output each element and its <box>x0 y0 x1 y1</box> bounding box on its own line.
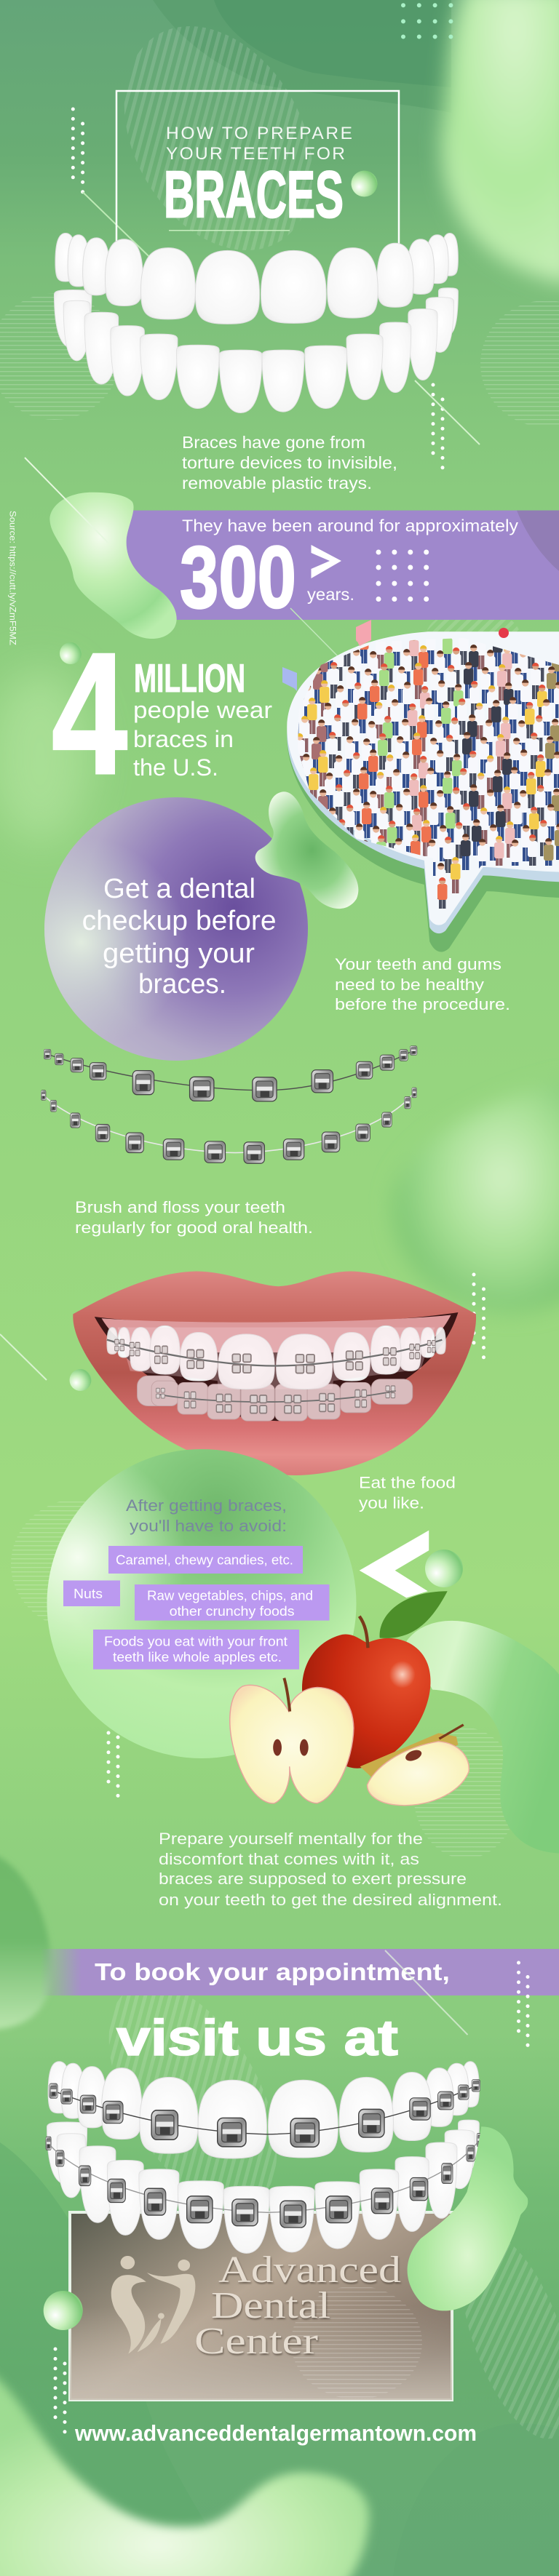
health note text: before the procedure. <box>335 995 510 1013</box>
stat: 4 million: the U.S. <box>133 754 218 781</box>
decorative dots: under circle <box>108 1733 118 1798</box>
checkup text: braces. <box>138 969 226 1000</box>
tag: raw vegetables <box>135 1584 329 1621</box>
blurred blob: left lower <box>0 1851 51 2030</box>
halved apple stem and seeds <box>284 1678 290 1712</box>
lower wire <box>49 2140 480 2212</box>
checkup text <box>82 874 277 1000</box>
icon: white chevron <box>360 1531 429 1598</box>
bubble edge <box>287 638 559 933</box>
people <box>290 627 559 914</box>
health note text: need to be healthy <box>335 976 484 994</box>
website url: www.advanceddentalgermantown.com <box>74 2420 477 2446</box>
tag: front teeth foods <box>93 1630 299 1670</box>
tag: nuts <box>63 1580 120 1606</box>
icon: sphere by chevron <box>425 1550 463 1587</box>
green blob over logo card <box>408 2126 528 2310</box>
clinic name <box>194 2249 401 2362</box>
blurred blob: top right <box>441 0 559 285</box>
stat: 4 million <box>52 618 272 810</box>
icon: sphere beside smile <box>70 1369 92 1391</box>
diagonal accent line <box>415 380 480 444</box>
lower brackets <box>46 2133 483 2228</box>
apple stem <box>360 1616 368 1648</box>
apple slice <box>367 1742 469 1806</box>
stat: 4 million: MILLION <box>134 656 245 701</box>
visit us at heading: visit us at <box>116 2009 398 2066</box>
booking text: To book your appointment, <box>95 1958 450 1985</box>
icon: pink speech bubble <box>356 620 371 646</box>
upper brackets <box>49 2080 480 2147</box>
illustration: smile with braces <box>73 1272 476 1475</box>
eat the food text <box>359 1474 456 1512</box>
mouth interior <box>95 1312 458 1421</box>
brush and floss text: Brush and floss your teeth <box>75 1198 285 1216</box>
illustration: crowd on speech bubble <box>282 620 559 952</box>
gums <box>102 1315 451 1352</box>
mental preparation text: discomfort that comes with it, as <box>159 1850 419 1868</box>
soft light patch: left <box>0 669 91 844</box>
illustration: apples <box>230 1591 469 1806</box>
decorative dots: beside title <box>73 109 83 194</box>
decorative dots: top right <box>403 5 453 37</box>
diagonal accent line <box>290 608 338 657</box>
eat the food text: you like. <box>359 1494 424 1512</box>
avoid heading: you'll have to avoid: <box>130 1517 287 1535</box>
eat the food text: Eat the food <box>359 1474 456 1491</box>
banner text: They have been around for approximately <box>182 517 518 535</box>
tag: front teeth foods: Foods you eat with your front <box>104 1634 288 1648</box>
mental preparation text <box>159 1830 502 1909</box>
icon: red heart badge <box>499 628 509 638</box>
title <box>164 124 352 231</box>
diagonal accent line <box>83 192 150 258</box>
panel: booking banner <box>40 1949 559 1995</box>
green splash blob <box>255 791 358 909</box>
clinic name: Center <box>194 2321 318 2362</box>
tag: nuts: Nuts <box>74 1586 103 1601</box>
stat: 4 million: braces in <box>133 726 234 752</box>
decorative dots: bottom left <box>55 2349 65 2433</box>
title: HOW TO PREPARE <box>166 124 352 143</box>
upper brackets <box>115 1339 435 1373</box>
bottom wave shapes <box>0 2142 559 2576</box>
upper wire <box>53 2086 476 2134</box>
halved apple <box>230 1685 354 1803</box>
peel behind slice <box>360 1733 458 1783</box>
tag: caramel <box>108 1546 303 1574</box>
top wave shapes <box>153 0 451 113</box>
blurred blob: right middle <box>392 1079 559 1313</box>
intro text: Braces have gone from <box>182 433 365 452</box>
checkup text: Get a dental <box>103 874 255 904</box>
panel: purple banner 300 years <box>124 511 559 626</box>
title: YOUR TEETH FOR <box>166 144 345 164</box>
panel: foods to avoid circle <box>47 1449 357 1758</box>
intro text: removable plastic trays. <box>182 474 372 493</box>
tag: caramel: Caramel, chewy candies, etc. <box>116 1552 293 1567</box>
checkup text: checkup before <box>82 906 277 936</box>
icon: blue speech bubble <box>282 667 297 691</box>
brush and floss text: regularly for good oral health. <box>75 1219 313 1237</box>
leaf <box>380 1591 448 1638</box>
diagonal accent line <box>385 1950 467 2035</box>
dot grid <box>378 552 429 599</box>
avoid heading: After getting braces, <box>126 1496 287 1515</box>
title: BRACES <box>164 159 344 231</box>
checkup text: getting your <box>103 938 255 969</box>
upper wire <box>107 1340 442 1365</box>
green droplet blob <box>49 493 177 639</box>
bubble shadow <box>287 641 559 952</box>
whole apple <box>302 1635 431 1768</box>
illustration: teeth with braces <box>46 2062 483 2253</box>
health note text: Your teeth and gums <box>335 955 501 973</box>
blurred blob: bottom <box>0 2369 369 2576</box>
upper teeth <box>107 1325 445 1389</box>
source credit: Source: https://cutt.ly/vZmF5MZ <box>7 511 17 645</box>
lips <box>73 1272 476 1475</box>
diagonal accent line <box>0 1334 47 1380</box>
icon: small sphere <box>60 642 82 664</box>
panel: dental checkup circle <box>44 797 308 1061</box>
tag: front teeth foods: teeth like whole apples etc. <box>113 1649 282 1664</box>
big number 300: 300 <box>180 527 296 626</box>
brush and floss text <box>75 1198 313 1237</box>
lower wire <box>157 1391 396 1402</box>
lower brackets <box>156 1386 395 1413</box>
illustration: braces wires <box>41 1046 417 1163</box>
avoid heading <box>126 1496 287 1535</box>
tag: raw vegetables: Raw vegetables, chips, and <box>147 1588 313 1603</box>
right tube blob <box>406 1621 559 1854</box>
decorative dots: below teeth <box>433 385 443 469</box>
panel: clinic logo card <box>70 2212 452 2400</box>
icon: title sphere <box>351 170 377 196</box>
title frame <box>116 91 399 251</box>
icon: chevron <box>312 545 341 578</box>
years label: years. <box>307 585 354 604</box>
tag: raw vegetables: other crunchy foods <box>170 1603 295 1619</box>
decorative dots: right of smile <box>474 1275 483 1358</box>
pink tint on teeth <box>118 1328 435 1389</box>
stat: 4 million: 4 <box>52 618 127 810</box>
health note text <box>335 955 510 1013</box>
diagonal accent line <box>25 458 108 543</box>
lower teeth <box>138 1376 413 1421</box>
bubble top <box>287 631 559 925</box>
mental preparation text: on your teeth to get the desired alignment. <box>159 1891 502 1909</box>
logo mark <box>111 2256 195 2353</box>
mental preparation text: Prepare yourself mentally for the <box>159 1830 423 1848</box>
intro text <box>182 433 397 493</box>
intro text: torture devices to invisible, <box>182 453 397 472</box>
mental preparation text: braces are supposed to exert pressure <box>159 1870 467 1888</box>
clinic name: Advanced <box>218 2249 401 2291</box>
clinic name: Dental <box>211 2285 330 2326</box>
icon: sphere on logo card <box>44 2291 83 2330</box>
decorative dots: banner right <box>518 1963 528 2047</box>
illustration: white teeth <box>54 233 458 412</box>
stat: 4 million: people wear <box>133 697 272 723</box>
